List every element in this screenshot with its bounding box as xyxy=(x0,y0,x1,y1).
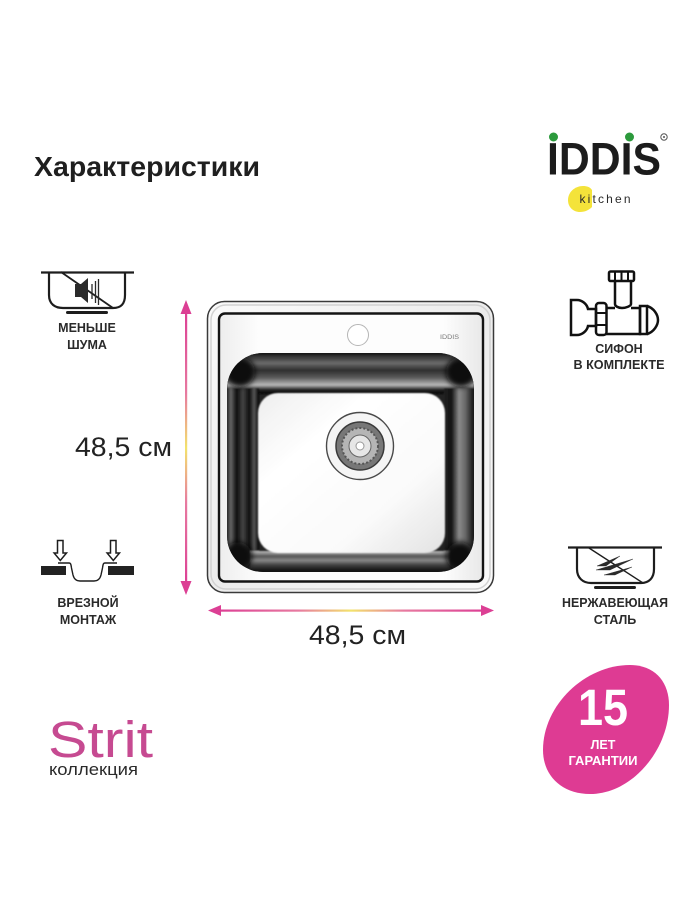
warranty badge: ГАРАНТИИ xyxy=(568,754,638,768)
tap hole xyxy=(348,324,368,346)
sink rim xyxy=(208,302,494,592)
bowl top wall xyxy=(227,353,474,394)
label: siphon: СИФОН xyxy=(595,342,643,356)
width label: 48,5 см xyxy=(309,620,406,650)
label: stainless steel: НЕРЖАВЕЮЩАЯ xyxy=(562,596,668,610)
brand mark: IDDIS xyxy=(440,335,459,341)
collection caption: коллекция xyxy=(49,760,138,779)
logo: IDDIS kitchen: IDDIS xyxy=(547,134,661,184)
height label: 48,5 см xyxy=(75,432,172,462)
label: flush mount: ВРЕЗНОЙ xyxy=(57,595,119,610)
warranty badge: 15 xyxy=(578,679,628,736)
label: siphon line 2: В КОМПЛЕКТЕ xyxy=(574,358,664,372)
vertical dimension arrow xyxy=(180,300,192,595)
bowl left wall xyxy=(227,388,259,553)
warranty badge: ЛЕТ xyxy=(591,738,616,752)
label: flush mount line 2: МОНТАЖ xyxy=(60,613,117,627)
sink deck xyxy=(219,314,483,582)
collection name: Strit xyxy=(48,711,153,768)
title: Характеристики xyxy=(34,151,260,182)
label: stainless steel line 2: СТАЛЬ xyxy=(594,613,636,627)
bowl bottom xyxy=(258,393,445,553)
logo: IDDIS kitchen xyxy=(547,132,667,212)
logo: IDDIS kitchen: kitchen xyxy=(580,192,630,206)
bowl lower wall xyxy=(250,551,450,572)
icon: siphon xyxy=(571,272,658,335)
sink photo xyxy=(208,302,494,592)
horizontal dimension arrow xyxy=(208,605,494,616)
icon: less noise xyxy=(41,272,134,314)
bowl xyxy=(224,353,476,572)
icon: flush mount xyxy=(41,540,134,581)
label: less noise line 2: ШУМА xyxy=(67,338,107,352)
bowl right wall xyxy=(444,388,474,553)
icon: stainless steel xyxy=(568,548,662,589)
drain xyxy=(326,412,394,480)
warranty badge xyxy=(543,665,669,794)
label: less noise: МЕНЬШЕ xyxy=(58,321,116,335)
